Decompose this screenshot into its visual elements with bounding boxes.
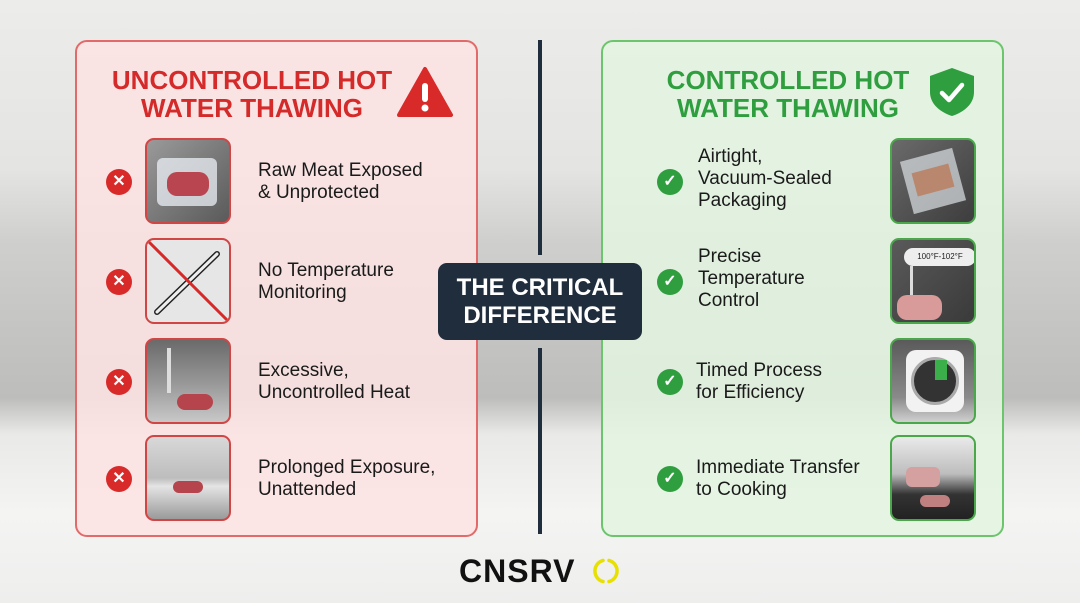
row 1: ✓	[663, 173, 677, 190]
row 4: to Cooking	[696, 479, 787, 500]
heading: controlled: CONTROLLED HOT	[667, 65, 909, 95]
icon: logo ring	[593, 558, 619, 584]
row 4: Prolonged Exposure,	[258, 457, 435, 478]
row 2	[106, 238, 394, 324]
row 4	[106, 435, 435, 521]
row 2: No Temperature	[258, 260, 394, 281]
row 1: Raw Meat Exposed	[258, 160, 423, 181]
icon: warning triangle	[397, 66, 453, 117]
row 3	[106, 338, 410, 424]
center label: the critical difference: DIFFERENCE	[463, 302, 617, 329]
heading: controlled	[667, 65, 909, 123]
row 1: ✕	[112, 173, 126, 190]
row 1	[106, 138, 423, 224]
row 3: Excessive,	[258, 360, 349, 381]
row 2: ✓	[663, 273, 677, 290]
row 4: ✓	[663, 470, 677, 487]
row 1: Airtight,	[698, 146, 762, 167]
row 2: Control	[698, 290, 759, 311]
row 4: Unattended	[258, 479, 356, 500]
row 2: Temperature	[698, 268, 805, 289]
row 1: Packaging	[698, 190, 787, 211]
row 3: Uncontrolled Heat	[258, 382, 410, 403]
logo: CNSRV: CNSRV	[459, 553, 575, 589]
row 2	[657, 238, 976, 324]
row 3: Timed Process	[696, 360, 822, 381]
row 2: ✕	[112, 273, 126, 290]
panel: uncontrolled	[75, 40, 478, 537]
row 2: Monitoring	[258, 282, 347, 303]
icon: shield check	[930, 68, 974, 116]
heading: controlled: WATER THAWING	[677, 93, 899, 123]
row 4	[657, 435, 976, 521]
row 2: 100°F-102°F	[917, 252, 963, 261]
row 3: for Efficiency	[696, 382, 804, 403]
center label: the critical difference	[438, 263, 642, 340]
center divider line top	[538, 40, 542, 255]
heading: uncontrolled: WATER THAWING	[141, 93, 363, 123]
center label: the critical difference: THE CRITICAL	[457, 274, 623, 301]
row 4: Immediate Transfer	[696, 457, 860, 478]
row 1	[657, 138, 976, 224]
row 1: Vacuum-Sealed	[698, 168, 832, 189]
row 3	[657, 338, 976, 424]
row 2: Precise	[698, 246, 761, 267]
row 3: ✕	[112, 373, 126, 390]
row 4: ✕	[112, 470, 126, 487]
row 3: ✓	[663, 373, 677, 390]
center divider line bottom	[538, 348, 542, 534]
row 1: & Unprotected	[258, 182, 379, 203]
heading: uncontrolled: UNCONTROLLED HOT	[112, 65, 392, 95]
panel: controlled	[601, 40, 1004, 537]
heading: uncontrolled	[112, 65, 392, 123]
